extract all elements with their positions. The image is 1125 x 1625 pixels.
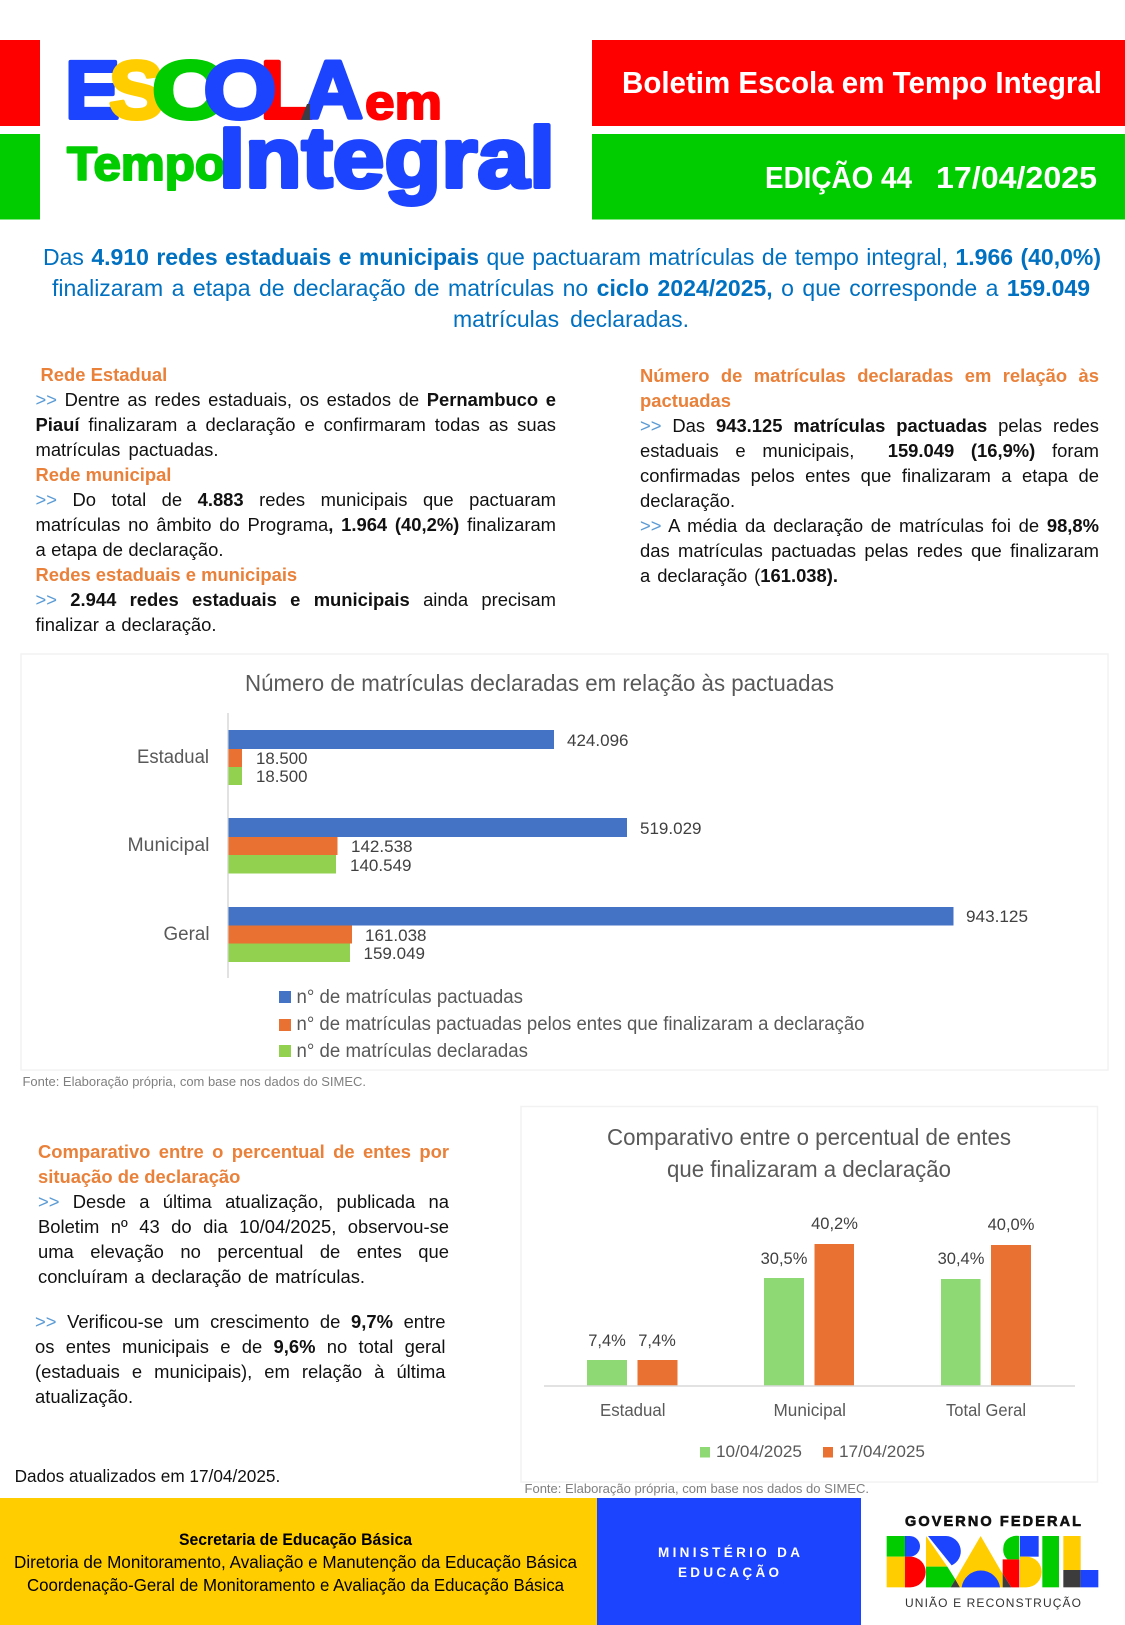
heading: comparison: situação de declaração	[38, 1166, 240, 1187]
heading: Rede municipal: Rede municipal	[36, 464, 171, 485]
category labels	[600, 1400, 1026, 1420]
category labels: Total Geral	[946, 1400, 1026, 1420]
logo: Escola em Tempo Integral: S	[109, 45, 164, 136]
source note for chart 2: Fonte: Elaboração própria, com base nos dados do SIMEC.	[524, 1481, 869, 1496]
paragraph: municipal networks: a etapa de declaração.	[36, 539, 224, 560]
logo: Escola em Tempo Integral: em	[365, 76, 442, 130]
paragraph: average declaration: >> A média da declaração de matrículas foi de 98,8%	[640, 515, 1099, 536]
source note for chart 1: Fonte: Elaboração própria, com base nos dados do SIMEC.	[22, 1074, 366, 1089]
logo: Governo Federal Brasil: GOVERNO FEDERAL	[905, 1514, 1081, 1530]
text block: growth figures: >> Verificou-se um crescimento de 9,7% entre	[35, 1311, 446, 1332]
legend	[700, 1442, 925, 1461]
heading: comparison	[38, 1141, 449, 1187]
header banner: edition and date	[592, 134, 1125, 220]
data labels	[256, 731, 1028, 963]
logo: Escola em Tempo Integral: Tempo	[67, 137, 225, 190]
data labels: 40,0%	[988, 1216, 1035, 1234]
paragraph: last update: uma elevação no percentual de entes que	[38, 1241, 449, 1262]
paragraph: average declaration: a declaração (161.038).	[640, 565, 838, 586]
heading: number of declared enrolments: Número de matrículas declaradas em relação às	[640, 365, 1099, 386]
text block: comparison since last update	[38, 1141, 449, 1287]
legend: 17/04/2025	[839, 1442, 925, 1461]
data labels: 30,5%	[761, 1250, 808, 1268]
paragraph: agreed enrolments: estaduais e municipais, 159.049 (16,9%) foram	[640, 440, 1099, 461]
data labels: 159.049	[364, 944, 425, 963]
category labels: Municipal	[774, 1400, 846, 1420]
logo: Governo Federal Brasil: UNIÃO E RECONSTRUÇÃO	[905, 1596, 1081, 1610]
data labels: 40,2%	[811, 1215, 858, 1233]
category labels: Estadual	[137, 747, 209, 768]
data labels: 7,4%	[638, 1332, 676, 1350]
paragraph: agreed enrolments: declaração.	[640, 490, 735, 511]
data labels: 18.500	[256, 749, 308, 768]
paragraph: agreed enrolments: confirmadas pelos entes que finalizaram a etapa de	[640, 465, 1099, 486]
paragraph: state networks: >> Dentre as redes estaduais, os estados de Pernambuco e	[36, 389, 556, 410]
footer: secretariat credits: Diretoria de Monitoramento, Avaliação e Manutenção da Educação Básica	[14, 1552, 577, 1572]
data labels: 424.096	[567, 731, 628, 750]
paragraph: last update: concluíram a declaração de matrículas.	[38, 1266, 365, 1287]
data labels: 7,4%	[588, 1332, 626, 1350]
footer: ministry of education block: EDUCAÇÃO	[678, 1565, 779, 1580]
footer: ministry of education block: MINISTÉRIO DA	[658, 1545, 800, 1560]
data labels	[588, 1215, 1035, 1350]
text column: state, municipal and combined networks	[36, 364, 556, 635]
data labels: 142.538	[351, 837, 412, 856]
data labels: 18.500	[256, 767, 308, 786]
heading: Redes estaduais e municipais: Redes estaduais e municipais	[36, 564, 297, 585]
footer: secretariat credits: Coordenação-Geral de Monitoramento e Avaliação da Educação Básica	[27, 1575, 564, 1595]
legend: n° de matrículas declaradas	[296, 1041, 528, 1062]
bars	[228, 730, 954, 962]
paragraph: pending networks	[36, 589, 556, 635]
paragraph: state networks	[36, 389, 556, 460]
text block: growth figures	[35, 1311, 446, 1407]
paragraph: last update	[38, 1191, 449, 1287]
category labels: Estadual	[600, 1400, 666, 1420]
chart title: Número de matrículas declaradas em relação às pactuadas	[245, 670, 834, 696]
logo: Escola em Tempo Integral: O	[204, 45, 276, 136]
chart title	[607, 1124, 1011, 1182]
header banner: edition and date: EDIÇÃO 44	[765, 160, 913, 195]
intro statement	[43, 244, 1101, 332]
header banner: edition and date: 17/04/2025	[936, 160, 1097, 195]
footer: ministry of education block	[597, 1498, 861, 1625]
text column: declared versus agreed enrolments	[640, 365, 1099, 586]
paragraph: last update: >> Desde a última atualização, publicada na	[38, 1191, 449, 1212]
panel: column chart comparing percentages	[521, 1106, 1098, 1482]
paragraph: agreed enrolments	[640, 415, 1099, 511]
intro statement: Das 4.910 redes estaduais e municipais que pactuaram matrículas de tempo integral, 1.966 (40,0%)	[43, 244, 1101, 270]
legend: n° de matrículas pactuadas pelos entes que finalizaram a declaração	[296, 1014, 864, 1035]
paragraph: agreed enrolments: >> Das 943.125 matrículas pactuadas pelas redes	[640, 415, 1099, 436]
category labels: Municipal	[128, 835, 210, 856]
axis line	[544, 1385, 1075, 1387]
text block: growth figures: atualização.	[35, 1386, 133, 1407]
logo: Escola em Tempo Integral: E	[65, 45, 120, 136]
logo: Escola em Tempo Integral	[65, 45, 555, 206]
logo: Governo Federal Brasil	[887, 1514, 1098, 1610]
intro statement: finalizaram a etapa de declaração de matrículas no ciclo 2024/2025, o que corresponde a 159.049	[52, 275, 1090, 301]
category labels: Geral	[164, 924, 210, 945]
paragraph: average declaration	[640, 515, 1099, 586]
text block: growth figures: (estaduais e municipais), em relação à última	[35, 1361, 446, 1382]
paragraph: pending networks: finalizar a declaração.	[36, 614, 216, 635]
legend	[279, 987, 864, 1062]
data labels: 943.125	[966, 907, 1028, 926]
paragraph: state networks: Piauí finalizaram a declaração e confirmaram todas as suas	[36, 414, 556, 435]
paragraph: state networks: matrículas pactuadas.	[36, 439, 218, 460]
intro statement: matrículas declaradas.	[453, 306, 689, 332]
paragraph: pending networks: >> 2.944 redes estaduais e municipais ainda precisam	[36, 589, 556, 610]
icon: Brasil colour-block wordmark	[887, 1536, 1098, 1587]
chart title: Comparativo entre o percentual de entes	[607, 1124, 1011, 1150]
logo: Escola em Tempo Integral: Integral	[219, 111, 555, 206]
left header colour bars	[0, 40, 40, 220]
columns	[587, 1244, 1031, 1386]
data labels: 161.038	[365, 926, 426, 945]
paragraph: average declaration: das matrículas pactuadas pelas redes que finalizaram	[640, 540, 1099, 561]
paragraph: municipal networks: >> Do total de 4.883 redes municipais que pactuaram	[36, 489, 556, 510]
paragraph: municipal networks	[36, 489, 556, 560]
text block: growth figures: os entes municipais e de 9,6% no total geral	[35, 1336, 446, 1357]
footer: secretariat credits	[0, 1498, 597, 1625]
axis line	[227, 713, 229, 978]
heading: number of declared enrolments: pactuadas	[640, 390, 731, 411]
data update note: Dados atualizados em 17/04/2025.	[15, 1466, 280, 1486]
header banner: bulletin title	[592, 40, 1125, 126]
logo: Escola em Tempo Integral: C	[152, 45, 225, 136]
data labels: 30,4%	[938, 1250, 985, 1268]
logo: Escola em Tempo Integral: L	[260, 45, 314, 136]
category labels	[128, 747, 210, 945]
paragraph: last update: Boletim nº 43 do dia 10/04/2025, observou-se	[38, 1216, 449, 1237]
heading: comparison: Comparativo entre o percentual de entes por	[38, 1141, 449, 1162]
panel: bar chart of declared enrolments	[21, 654, 1108, 1070]
legend: n° de matrículas pactuadas	[296, 987, 523, 1008]
data labels: 519.029	[640, 819, 702, 838]
legend: 10/04/2025	[716, 1442, 802, 1461]
heading: number of declared enrolments	[640, 365, 1099, 411]
header banner: bulletin title: Boletim Escola em Tempo Integral	[622, 65, 1102, 100]
logo: Escola em Tempo Integral: A	[303, 45, 363, 136]
chart title: que finalizaram a declaração	[667, 1156, 951, 1182]
data labels: 140.549	[350, 856, 412, 875]
footer: secretariat credits: Secretaria de Educação Básica	[179, 1531, 413, 1549]
paragraph: municipal networks: matrículas no âmbito do Programa, 1.964 (40,2%) finalizaram	[36, 514, 556, 535]
heading: Rede Estadual: Rede Estadual	[40, 364, 167, 385]
